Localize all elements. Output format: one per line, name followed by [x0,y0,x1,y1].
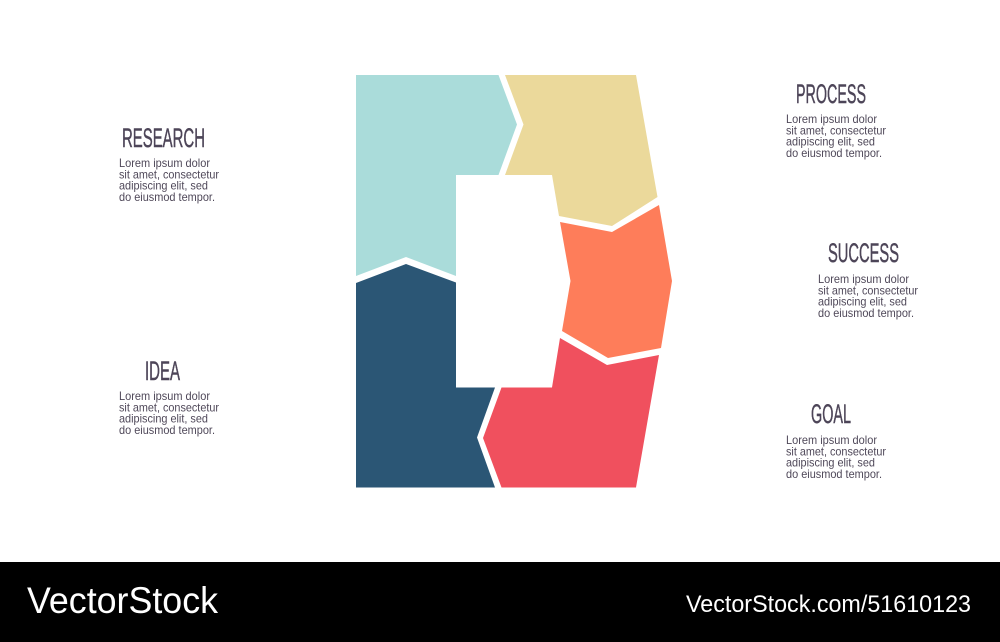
segment: research (teal) [356,75,517,276]
segment: idea (navy) [356,264,495,488]
body: success: adipiscing elit, sed [818,296,907,309]
body: success: sit amet, consectetur [818,284,918,297]
text block: research [119,123,219,204]
body: research: sit amet, consectetur [119,168,219,181]
text block: success [818,238,918,320]
body: process: adipiscing elit, sed [786,136,875,149]
heading: research: RESEARCH [122,123,205,153]
heading: goal: GOAL [811,399,851,429]
footer logo: VectorStock [27,580,218,621]
body: research: adipiscing elit, sed [119,180,208,193]
body: goal: sit amet, consectetur [786,445,886,458]
footer image id: VectorStock.com/51610123 [686,591,971,618]
body: process: do eiusmod tempor. [786,147,882,160]
diagram: five arrow segments [356,75,672,488]
body: idea: do eiusmod tempor. [119,424,215,437]
heading: success: SUCCESS [828,238,899,268]
body: success: do eiusmod tempor. [818,307,914,320]
body: process: Lorem ipsum dolor [786,113,877,126]
text block: process [786,79,886,160]
body: idea: adipiscing elit, sed [119,413,208,426]
body: goal: Lorem ipsum dolor [786,434,877,447]
body: success: Lorem ipsum dolor [818,273,909,286]
body: goal: adipiscing elit, sed [786,457,875,470]
heading: process: PROCESS [796,79,866,109]
body: goal: do eiusmod tempor. [786,468,882,481]
heading: idea: IDEA [145,356,180,386]
body: research: do eiusmod tempor. [119,191,215,204]
footer bar [0,562,1000,642]
text block: goal [786,399,886,481]
segment: goal (red) [483,338,659,488]
body: idea: sit amet, consectetur [119,401,219,414]
body: idea: Lorem ipsum dolor [119,390,210,403]
body: research: Lorem ipsum dolor [119,157,210,170]
body: process: sit amet, consectetur [786,124,886,137]
segment: process (yellow) [505,75,658,226]
segment: success (orange) [560,205,672,358]
text block: idea [119,356,219,437]
